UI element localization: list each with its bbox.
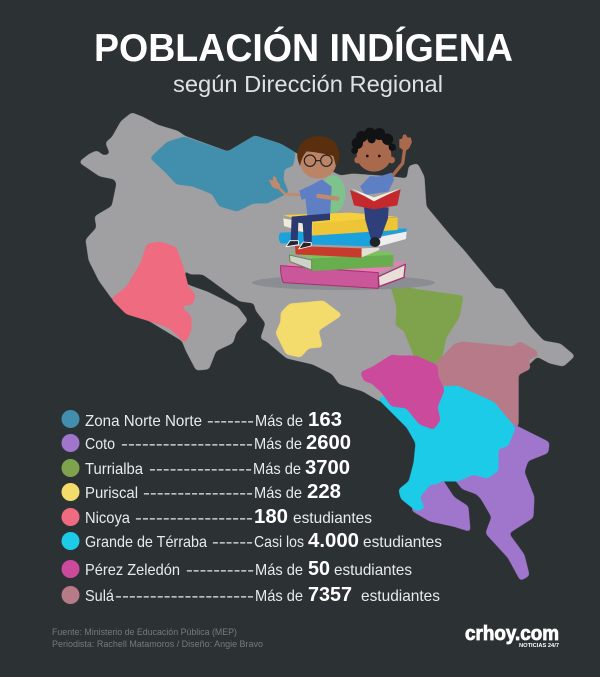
glasses — [304, 155, 332, 166]
reading boy eyes — [366, 155, 381, 157]
legend row: Sulá: Más de — [255, 588, 303, 605]
legend row: Nicoya: 180 — [254, 506, 288, 528]
title: POBLACIÓN INDÍGENA — [94, 26, 513, 70]
reading boy head — [357, 138, 391, 172]
legend row: Pérez Zeledón: estudiantes — [334, 562, 412, 579]
region: Turrialba — [391, 283, 462, 370]
shadow under books — [252, 275, 435, 290]
legend row: Zona Norte Norte: Más de — [255, 413, 303, 430]
illustration: children on stack of books — [252, 128, 435, 290]
reading boy hair — [351, 128, 396, 154]
legend row: Turrialba — [62, 457, 350, 479]
legend row: Pérez Zeledón: 50 — [308, 558, 330, 580]
region: Nicoya — [113, 243, 194, 341]
legend row: Sulá: estudiantes — [361, 588, 440, 605]
legend row: Pérez Zeledón: ---------- — [186, 562, 254, 579]
map base: country silhouette — [81, 114, 573, 425]
legend row: Pérez Zeledón — [62, 558, 412, 580]
reading boy arm and hand — [392, 147, 405, 177]
legend row: Puriscal: 228 — [307, 481, 341, 503]
reading boy shoes — [370, 237, 380, 247]
blue book — [279, 228, 407, 247]
legend row: Turrialba: Más de — [253, 461, 301, 478]
legend row: Zona Norte Norte: 163 — [308, 409, 342, 431]
open red book — [350, 189, 401, 209]
legend row: Grande de Térraba: Grande de Térraba — [85, 534, 207, 551]
map of Costa Rica — [81, 114, 573, 579]
boy reading — [350, 128, 412, 247]
legend row: Zona Norte Norte: Zona Norte Norte — [85, 413, 202, 430]
legend row: Turrialba: 3700 — [305, 457, 350, 479]
legend row: Grande de Térraba: 4.000 — [308, 530, 359, 552]
yellow book — [283, 213, 398, 236]
boy hair — [297, 136, 339, 166]
legend — [62, 409, 442, 606]
legend row: Coto: 2600 — [306, 432, 351, 454]
legend row: Sulá: 7357 — [308, 584, 352, 606]
legend row: Zona Norte Norte — [62, 409, 342, 431]
boy head — [300, 147, 336, 179]
legend row: Nicoya: estudiantes — [293, 510, 372, 527]
legend row: Grande de Térraba — [62, 530, 442, 552]
legend row: Pérez Zeledón: Pérez Zeledón — [85, 562, 180, 579]
source and credits: Periodista: Rachell Matamoros / Diseño: Angie Bravo — [52, 639, 263, 650]
legend row: Turrialba: --------------- — [149, 461, 252, 478]
region: Coto — [413, 424, 548, 579]
pink book — [281, 262, 407, 288]
legend row: Puriscal: Puriscal — [85, 485, 138, 502]
boy shirt — [299, 179, 332, 217]
legend row: Grande de Térraba: estudiantes — [363, 534, 442, 551]
region: Grande de Térraba — [380, 387, 514, 510]
legend row: Pérez Zeledón: Más de — [255, 562, 303, 579]
red book — [295, 246, 379, 258]
source and credits — [52, 627, 263, 650]
region: Sulá — [430, 343, 536, 432]
boy trousers — [291, 213, 330, 243]
logo: crhoy.com: NOTICIAS 24/7 — [519, 643, 559, 649]
logo: crhoy.com: crhoy.com — [465, 623, 559, 645]
legend row: Coto: ------------------- — [121, 436, 253, 453]
region: Pérez Zeledón — [362, 356, 443, 428]
green book — [288, 252, 393, 271]
legend row: Grande de Térraba: ------ — [212, 534, 253, 551]
legend row: Coto: Más de — [254, 436, 302, 453]
legend row: Coto: Coto — [85, 436, 115, 453]
legend row: Puriscal — [62, 481, 341, 503]
legend row: Nicoya — [62, 506, 372, 528]
subtitle: según Dirección Regional — [173, 71, 443, 97]
legend row: Sulá: -------------------- — [115, 588, 254, 605]
backpack — [321, 175, 345, 213]
reading boy trousers — [364, 207, 389, 238]
boy with glasses — [269, 136, 345, 249]
legend row: Zona Norte Norte: ------- — [207, 413, 254, 430]
legend row: Puriscal: Más de — [254, 485, 302, 502]
source and credits: Fuente: Ministerio de Educación Pública (MEP) — [52, 627, 237, 638]
legend row: Sulá: Sulá — [85, 588, 114, 605]
boy arm and hand — [276, 185, 302, 195]
legend row: Nicoya: ----------------- — [135, 510, 253, 527]
boy shoes — [286, 241, 299, 247]
legend row: Coto — [62, 432, 351, 454]
legend row: Sulá — [62, 584, 440, 606]
region: Zona Norte Norte — [152, 137, 294, 210]
reading boy shirt — [360, 173, 394, 195]
legend row: Grande de Térraba: Casi los — [254, 534, 304, 551]
legend row: Nicoya: Nicoya — [85, 510, 130, 527]
legend row: Puriscal: ---------------- — [143, 485, 253, 502]
region: Puriscal — [277, 302, 340, 356]
legend row: Turrialba: Turrialba — [85, 461, 143, 478]
